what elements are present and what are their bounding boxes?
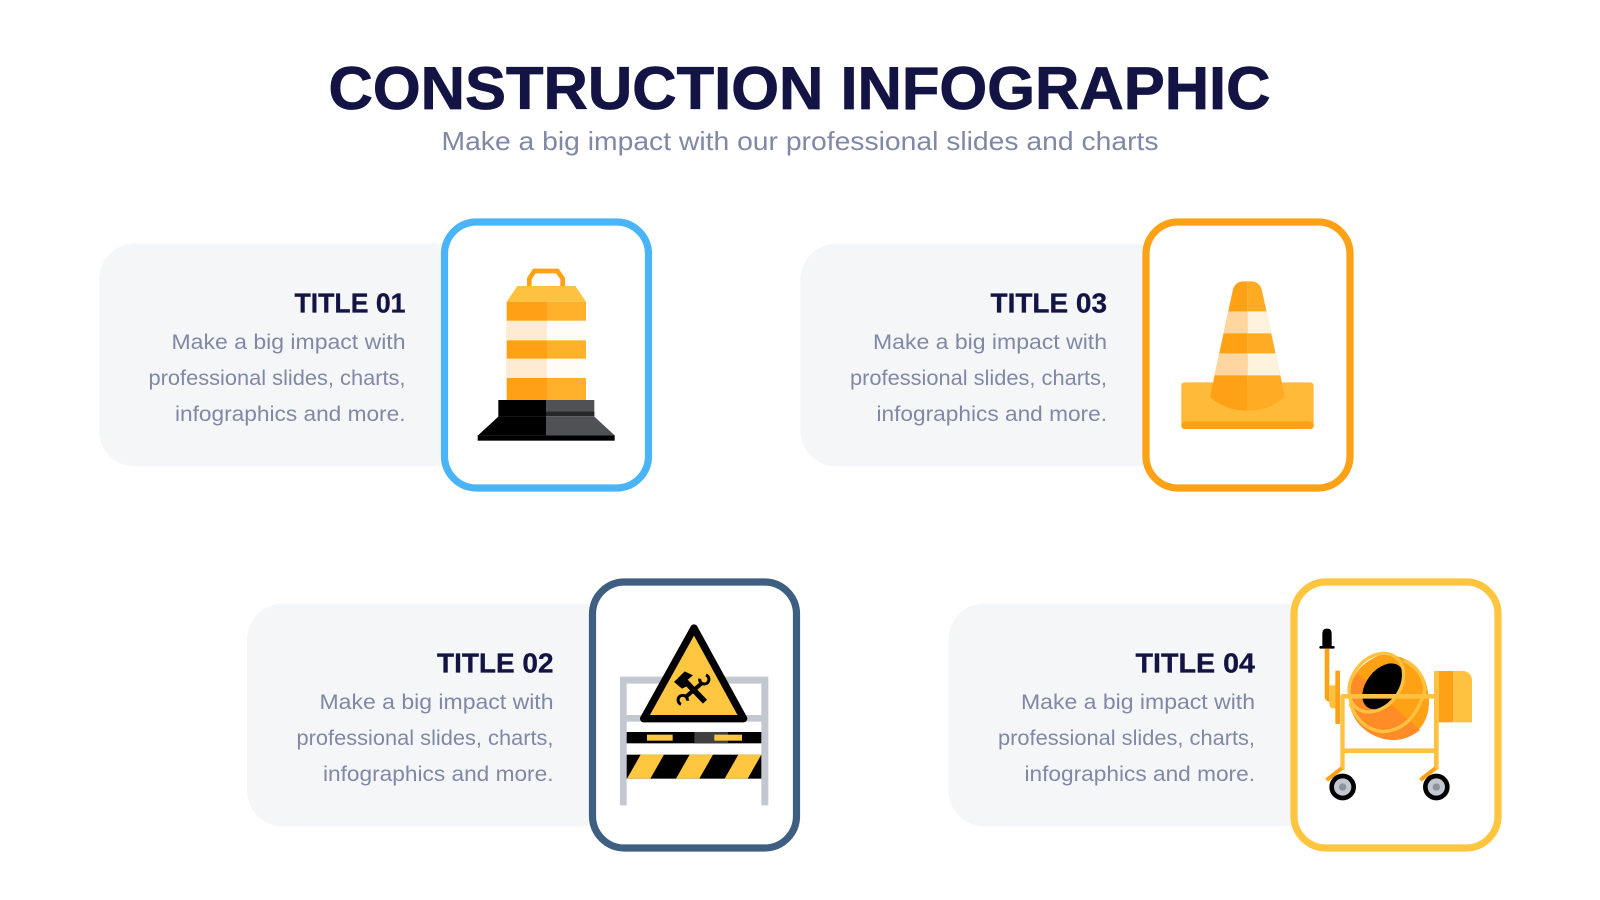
- subtitle: Make a big impact with our professional slides and charts: [442, 126, 1158, 156]
- panel background 01: [99, 244, 469, 466]
- heading: title 01: TITLE 01: [294, 288, 406, 318]
- text block 01: infographics and more.: [175, 402, 406, 426]
- panel background 04: [948, 604, 1318, 826]
- icon: road barrier with warning sign: [620, 628, 768, 805]
- text block 04: infographics and more.: [1024, 762, 1255, 786]
- heading: title 03: TITLE 03: [990, 288, 1107, 318]
- text block 02: [296, 690, 554, 786]
- card frame 04: [1294, 582, 1498, 848]
- icon: traffic barrel: [478, 271, 615, 441]
- text block 01: Make a big impact with: [172, 330, 406, 354]
- text block 04: professional slides, charts,: [998, 726, 1255, 750]
- text block 04: [998, 690, 1255, 786]
- text block 03: professional slides, charts,: [850, 366, 1107, 390]
- text block 02: professional slides, charts,: [296, 726, 554, 750]
- title: CONSTRUCTION INFOGRAPHIC: [328, 55, 1270, 122]
- text block 03: Make a big impact with: [873, 330, 1107, 354]
- text block 02: Make a big impact with: [320, 690, 554, 714]
- panel background 03: [800, 244, 1170, 466]
- card frame 02: [592, 582, 796, 848]
- icon: traffic cone: [1181, 281, 1314, 429]
- panel background 02: [247, 604, 617, 826]
- panel: title 03: [800, 222, 1350, 488]
- text block 02: infographics and more.: [323, 762, 554, 786]
- card frame 01: [444, 222, 648, 488]
- panel: title 01: [99, 222, 648, 488]
- text block 04: Make a big impact with: [1021, 690, 1255, 714]
- text block 03: infographics and more.: [876, 402, 1107, 426]
- text block 01: [148, 330, 406, 426]
- text block 03: [850, 330, 1107, 426]
- heading: title 02: TITLE 02: [437, 648, 554, 678]
- card frame 03: [1146, 222, 1350, 488]
- panel: title 04: [948, 582, 1498, 848]
- icon: cement mixer: [1319, 629, 1472, 800]
- text block 01: professional slides, charts,: [148, 366, 406, 390]
- heading: title 04: TITLE 04: [1136, 648, 1255, 678]
- panel: title 02: [247, 582, 796, 848]
